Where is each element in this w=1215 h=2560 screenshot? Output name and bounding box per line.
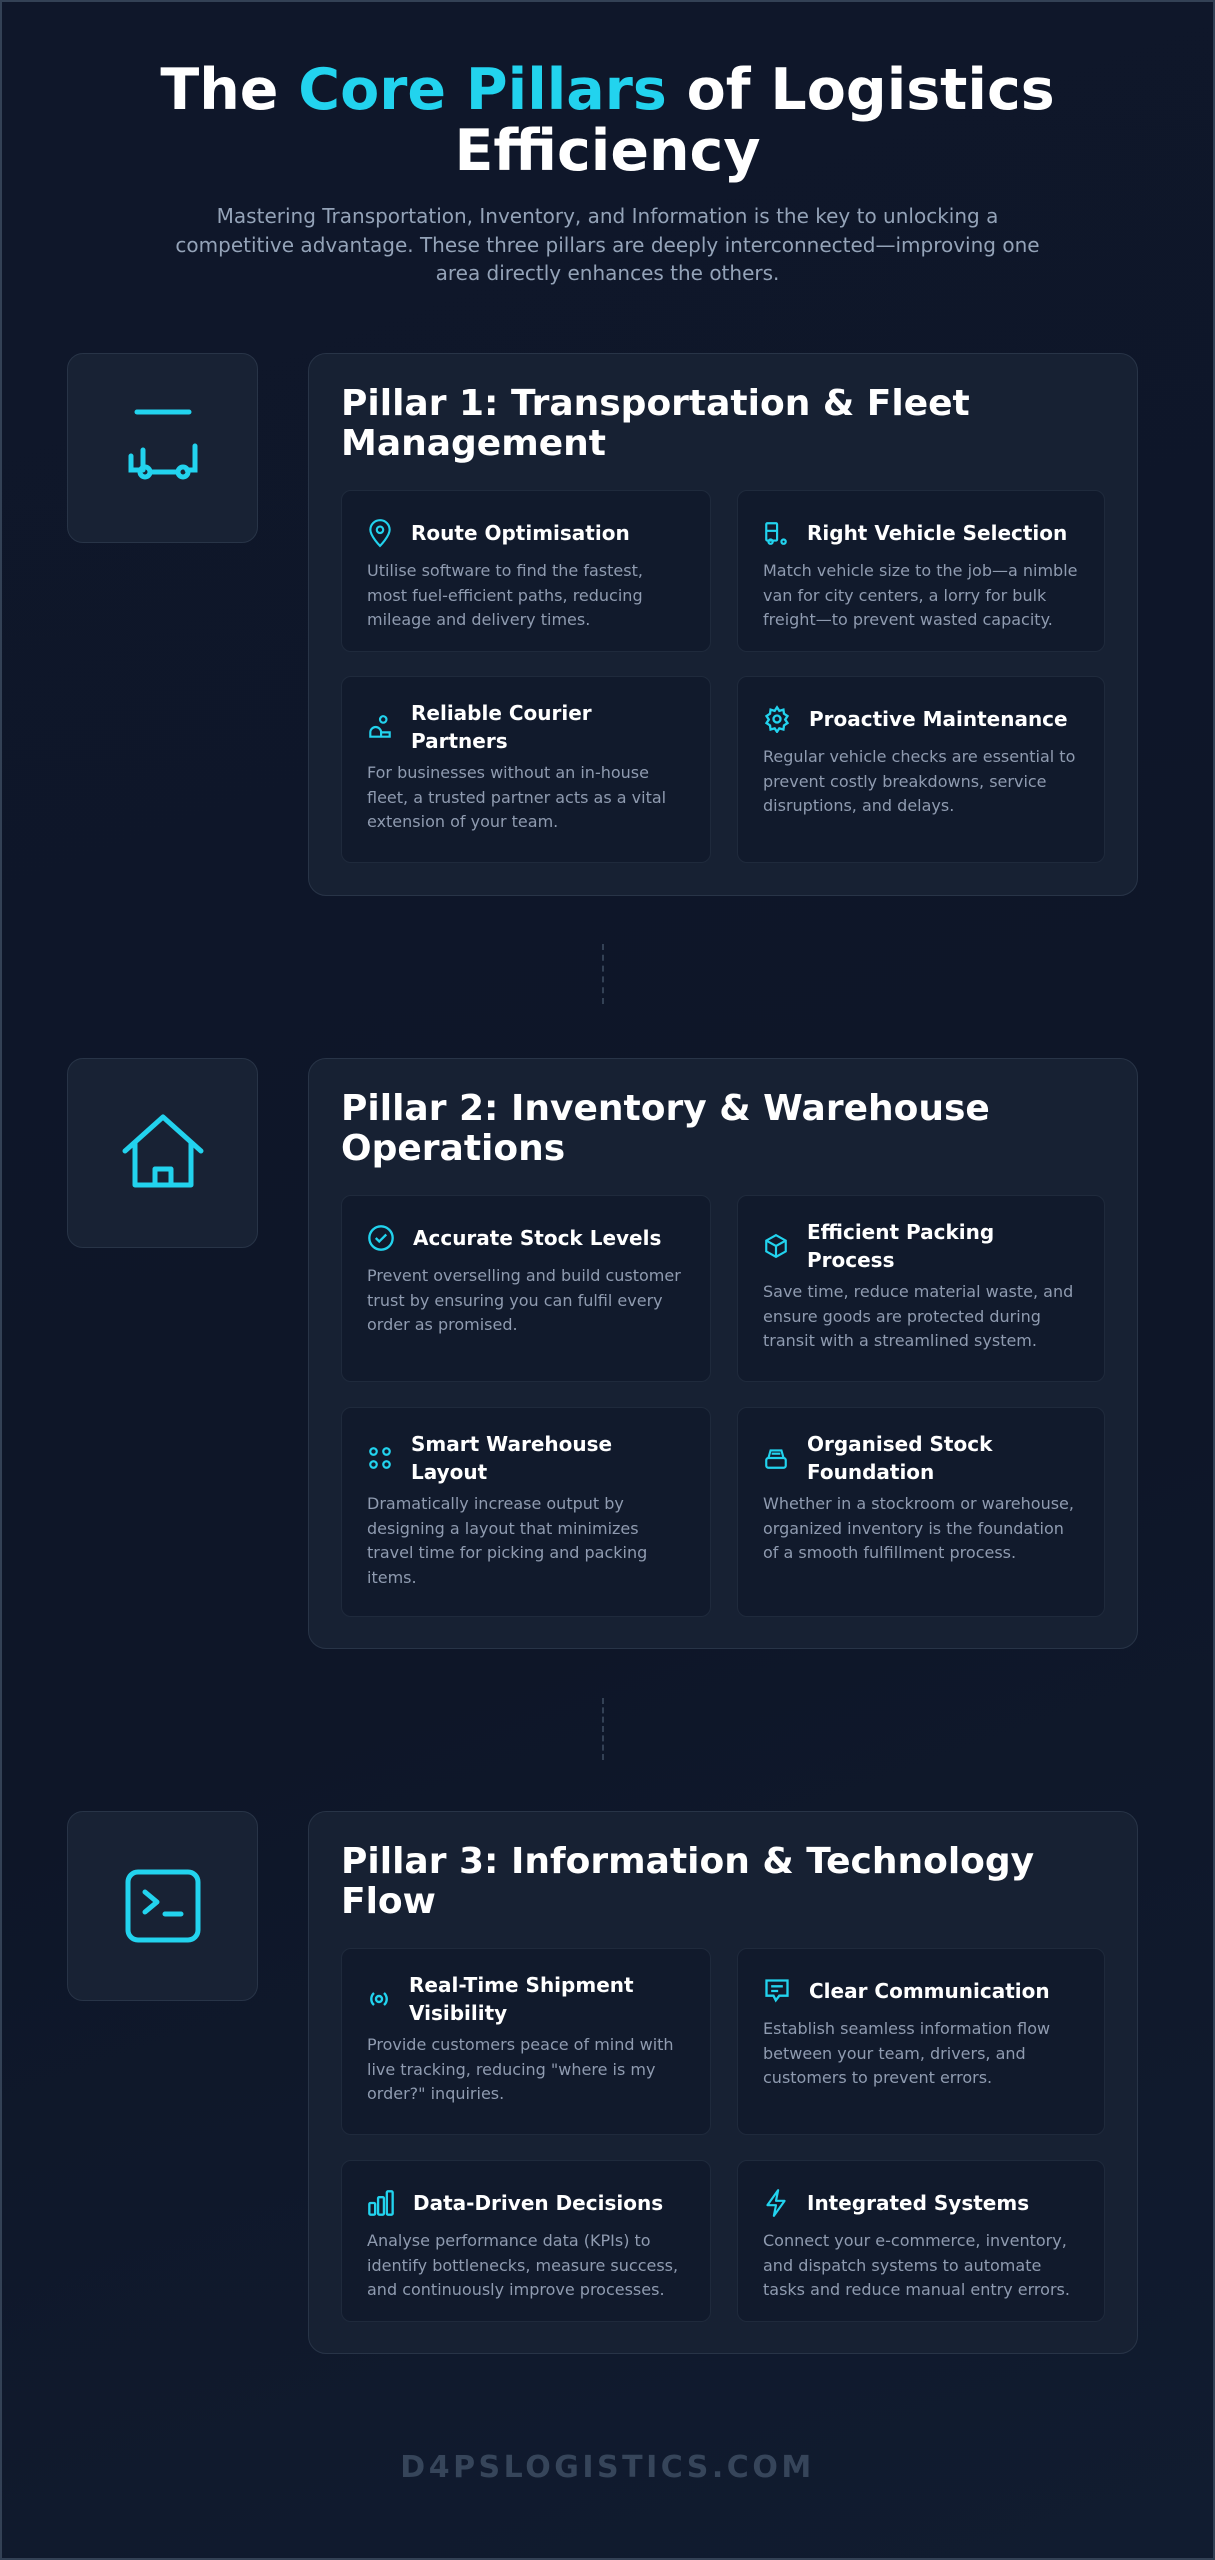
heading: pillar 1: Pillar 1: Transportation & Fleet Management [341, 383, 970, 464]
card: reliable courier partners: For businesses without an in-house fleet, a trusted partner acts as a vital extension of your team. [367, 763, 666, 831]
card: accurate stock levels [341, 1195, 711, 1382]
card: integrated systems: Integrated Systems [807, 2191, 1029, 2215]
footer brand: D4PSLOGISTICS.COM [400, 2450, 815, 2485]
card: right vehicle selection [737, 490, 1105, 652]
card: reliable courier partners: Reliable Courier Partners [411, 701, 592, 753]
title [160, 57, 1055, 184]
icon: house (pillar 2) [67, 1058, 258, 1248]
card: smart warehouse layout: Dramatically increase output by designing a layout that minimizes travel time for picking and packing items. [367, 1494, 647, 1586]
card: route optimisation: Route Optimisation [411, 521, 630, 545]
card: integrated systems: Connect your e-commerce, inventory, and dispatch systems to automate tasks and reduce manual entry errors. [763, 2231, 1070, 2299]
title: Efficiency [454, 118, 760, 184]
card: data-driven decisions: Analyse performance data (KPIs) to identify bottlenecks, measure success, and continuously improve processes. [367, 2231, 678, 2299]
card: real-time shipment visibility [341, 1948, 711, 2135]
subtitle: Mastering Transportation, Inventory, and Information is the key to unlocking a competitive advantage. These three pillars are deeply interconnected—improving one area directly enhances the others. [175, 204, 1040, 285]
card: right vehicle selection: Right Vehicle Selection [807, 521, 1067, 545]
panel: pillar 2 [308, 1058, 1138, 1649]
card: data-driven decisions [341, 2160, 711, 2322]
card: right vehicle selection: Match vehicle size to the job—a nimble van for city centers, a lorry for bulk freight—to prevent wasted capacity. [763, 561, 1077, 629]
card: data-driven decisions: Data-Driven Decisions [413, 2191, 663, 2215]
icon: terminal (pillar 3) [67, 1811, 258, 2001]
panel: pillar 3 [308, 1811, 1138, 2354]
card: clear communication [737, 1948, 1105, 2135]
card: proactive maintenance: Proactive Maintenance [809, 707, 1068, 731]
panel: pillar 1 [308, 353, 1138, 896]
title: The Core Pillars of Logistics [160, 57, 1055, 123]
card: organised stock foundation: Organised Stock Foundation [807, 1432, 992, 1484]
card: proactive maintenance [737, 676, 1105, 863]
icon: truck (pillar 1) [67, 353, 258, 543]
card: reliable courier partners [341, 676, 711, 863]
card: accurate stock levels: Accurate Stock Levels [413, 1226, 661, 1250]
card: smart warehouse layout: Smart Warehouse Layout [411, 1432, 612, 1484]
card: clear communication: Establish seamless information flow between your team, drivers, and customers to prevent errors. [763, 2019, 1050, 2087]
card: route optimisation: Utilise software to find the fastest, most fuel-efficient paths, reducing mileage and delivery times. [367, 561, 643, 629]
card: organised stock foundation [737, 1407, 1105, 1617]
heading: pillar 3: Pillar 3: Information & Technology Flow [341, 1841, 1034, 1922]
card: clear communication: Clear Communication [809, 1979, 1050, 2003]
card: accurate stock levels: Prevent overselling and build customer trust by ensuring you can fulfil every order as promised. [367, 1266, 681, 1334]
card: efficient packing process [737, 1195, 1105, 1382]
card: efficient packing process: Save time, reduce material waste, and ensure goods are protected during transit with a streamlined system. [763, 1282, 1073, 1350]
card: organised stock foundation: Whether in a stockroom or warehouse, organized inventory is the foundation of a smooth fulfillment process. [763, 1494, 1074, 1562]
card: real-time shipment visibility: Provide customers peace of mind with live tracking, reducing "where is my order?" inquiries. [367, 2035, 674, 2103]
card: smart warehouse layout [341, 1407, 711, 1617]
card: route optimisation [341, 490, 711, 652]
card: integrated systems [737, 2160, 1105, 2322]
card: real-time shipment visibility: Real-Time Shipment Visibility [409, 1973, 634, 2025]
card: proactive maintenance: Regular vehicle checks are essential to prevent costly breakdowns, service disruptions, and delays. [763, 747, 1075, 815]
card: efficient packing process: Efficient Packing Process [807, 1220, 994, 1272]
heading: pillar 2: Pillar 2: Inventory & Warehouse Operations [341, 1088, 990, 1169]
